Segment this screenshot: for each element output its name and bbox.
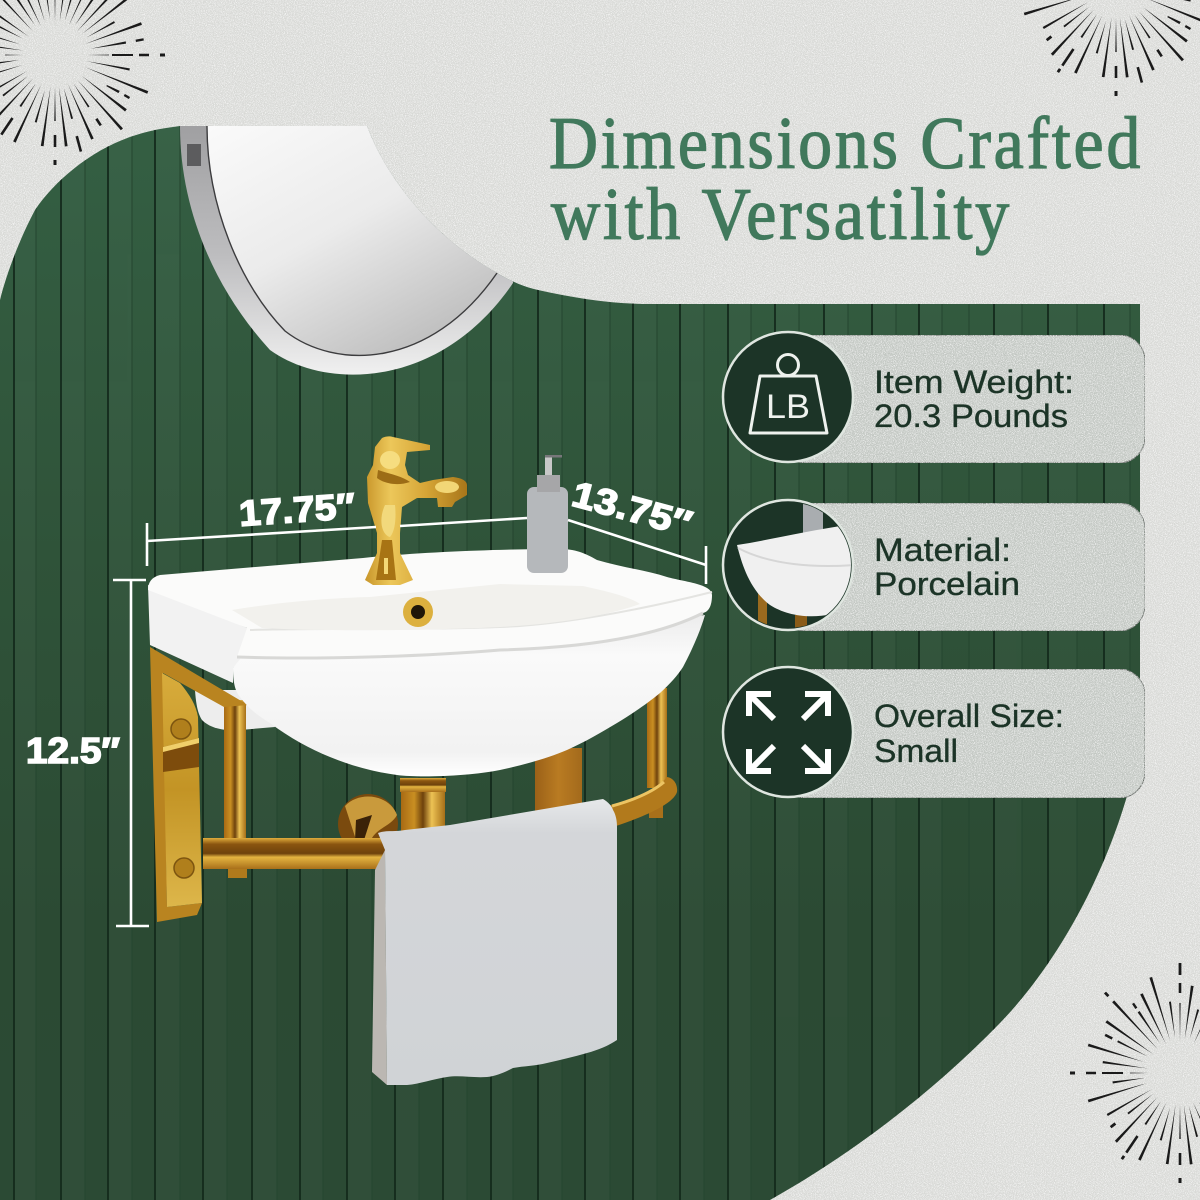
card text: Overall Size:	[874, 698, 1064, 734]
card text: Porcelain	[874, 566, 1020, 602]
card: material	[723, 500, 1145, 635]
dimension: depth 13.75	[568, 473, 706, 584]
soap dispenser	[527, 455, 568, 573]
card text: Material:	[874, 532, 1011, 568]
card text: Small	[874, 733, 958, 769]
dimension: height 12.5: 12.5″	[26, 730, 120, 771]
basin inner bowl	[232, 584, 640, 630]
title	[549, 103, 1143, 256]
wall plate screws	[171, 719, 194, 878]
card background	[780, 669, 1145, 798]
icon: weight: LB	[766, 388, 810, 426]
decoration: sunburst top left	[0, 0, 165, 165]
card background	[780, 503, 1145, 631]
gold faucet	[365, 436, 467, 585]
towel	[372, 799, 617, 1085]
icon: weight	[723, 332, 853, 462]
right frame post	[647, 688, 667, 788]
dimension: depth 13.75: 13.75″	[568, 473, 696, 544]
card text	[874, 532, 1020, 602]
towel bar flange	[338, 794, 398, 854]
left gold wall plate	[150, 647, 248, 922]
towel bar left	[203, 838, 385, 869]
overflow ring	[403, 597, 433, 627]
drain pipe	[401, 778, 445, 833]
basin body	[233, 615, 705, 776]
wall plate reflection band	[163, 738, 199, 772]
card text	[874, 364, 1074, 434]
left frame post	[224, 700, 246, 846]
underside of basin back	[195, 690, 275, 730]
card text: 20.3 Pounds	[874, 398, 1068, 434]
basin left wing face	[148, 585, 247, 683]
title: Dimensions Crafted	[549, 103, 1143, 185]
icon: porcelain basin close-up	[723, 500, 855, 635]
decoration: sunburst top right	[1006, 0, 1200, 96]
card background	[780, 335, 1145, 463]
decoration: sunburst bottom right	[1070, 963, 1200, 1183]
mirror	[180, 110, 520, 375]
icon: expand arrows	[723, 667, 853, 797]
basin rim shading	[250, 592, 712, 630]
product: wall-mounted sink with gold frame and towel	[148, 436, 712, 1085]
basin deck	[148, 549, 712, 658]
back bracket	[535, 748, 582, 814]
card: item weight	[723, 332, 1145, 463]
card text: Item Weight:	[874, 364, 1074, 400]
dimension: width 17.75	[147, 485, 527, 566]
title: with Versatility	[551, 174, 1012, 256]
towel bar right	[608, 777, 677, 826]
dimension: width 17.75: 17.75″	[238, 485, 356, 534]
card text	[874, 698, 1064, 769]
mirror glass	[207, 110, 497, 355]
mirror frame	[180, 110, 520, 375]
card: overall size	[723, 667, 1145, 798]
